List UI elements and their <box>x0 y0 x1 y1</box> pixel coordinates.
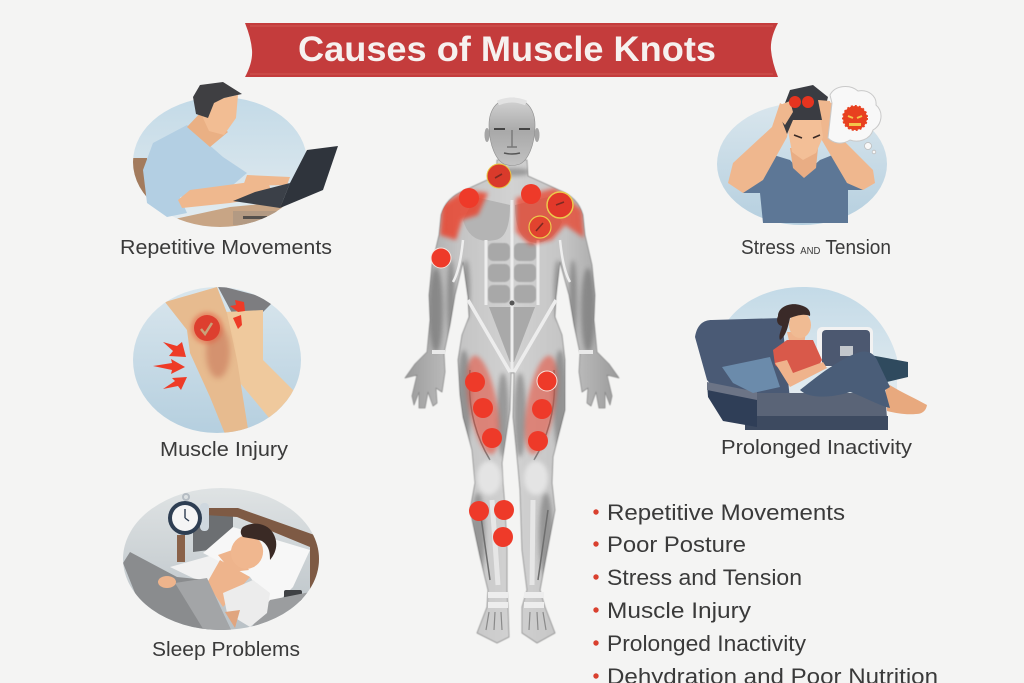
label: muscle injury: Muscle Injury <box>160 439 288 461</box>
bullet: stress and tension: Stress and Tension <box>607 565 802 590</box>
illustration: sleep problems <box>123 488 320 632</box>
illustration: stress and tension <box>717 85 887 225</box>
knot markers <box>431 164 573 547</box>
illustration: prolonged inactivity <box>695 287 927 430</box>
label: stress and tension: Stress AND Tension <box>741 237 891 259</box>
causes list <box>593 500 938 683</box>
anatomical body figure <box>405 98 619 643</box>
bullet: prolonged inactivity: Prolonged Inactivity <box>607 631 807 656</box>
body silhouette <box>405 160 619 643</box>
body shading <box>429 168 595 577</box>
thought bubble <box>828 86 881 154</box>
bullet: muscle injury: Muscle Injury <box>607 598 752 623</box>
head <box>484 98 540 166</box>
red muscle glow <box>440 188 584 457</box>
illustration: repetitive movements <box>133 82 338 230</box>
leg muscle detail <box>469 370 555 630</box>
torso muscle detail <box>432 197 593 372</box>
bullet: repetitive movements: Repetitive Movements <box>607 500 845 525</box>
icon: stress virus <box>843 106 867 130</box>
label: sleep problems: Sleep Problems <box>152 639 300 661</box>
bullet: poor posture: Poor Posture <box>607 532 746 557</box>
label: repetitive movements: Repetitive Movements <box>120 237 332 259</box>
icon: alarm clock <box>168 494 209 535</box>
title: Causes of Muscle Knots <box>298 30 716 69</box>
label: prolonged inactivity: Prolonged Inactivity <box>721 437 912 459</box>
illustration: muscle injury <box>133 285 301 434</box>
title banner <box>245 23 778 77</box>
